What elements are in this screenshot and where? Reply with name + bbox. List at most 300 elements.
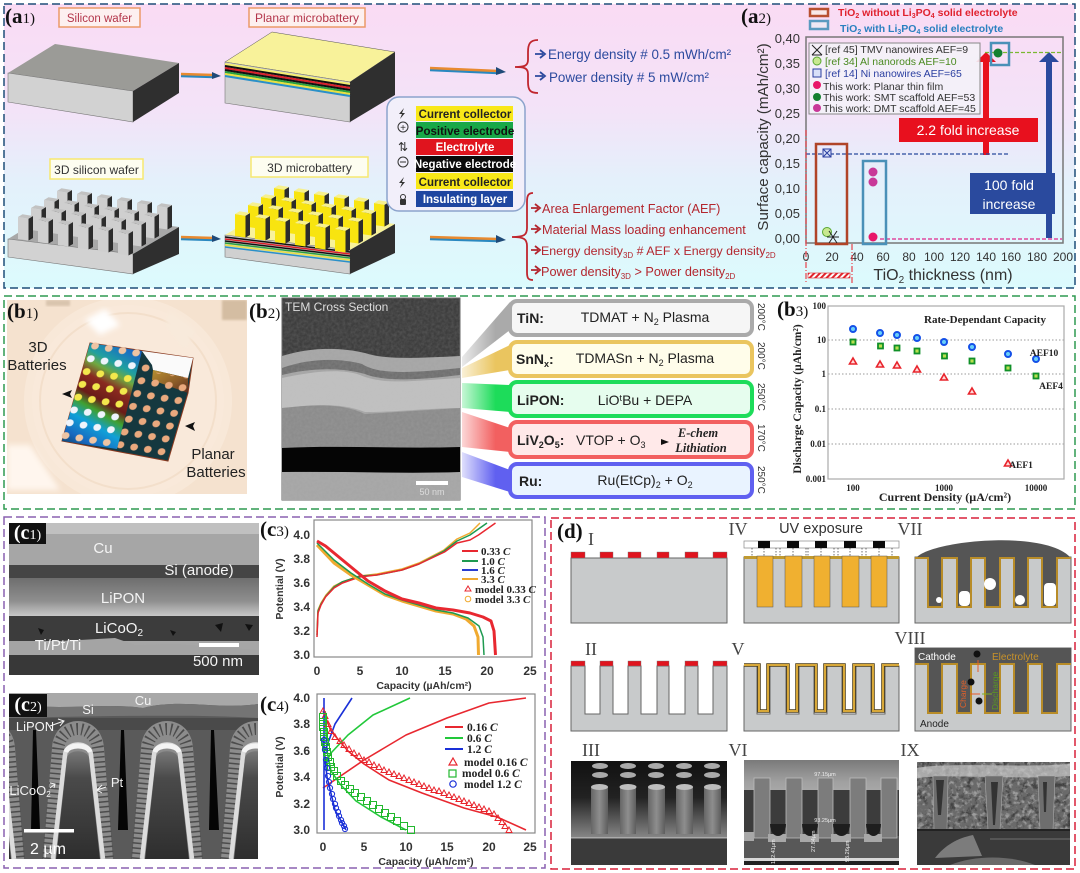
- SEM labels: Cu: [93, 540, 113, 557]
- y axis labels: 0,15: [775, 156, 800, 171]
- step VI SEM photo: VI: [728, 740, 748, 760]
- top legend: 3: [897, 29, 901, 36]
- y axis labels: 0,35: [775, 56, 800, 71]
- legend: model 0.16 C: [464, 757, 528, 769]
- chart frame: [806, 37, 1063, 243]
- step VIII: Anode: [920, 719, 949, 730]
- text: 3D metrics: > Power density: [631, 265, 726, 279]
- top legend: solid electrolyte: [920, 23, 1003, 35]
- step VI SEM photo: 97.15µm: [814, 772, 836, 778]
- step VI SEM photo: 27.84µm: [811, 830, 817, 852]
- layer: LiV2O5: E-chem: [677, 426, 718, 440]
- step IX SEM photo: [900, 740, 1070, 865]
- arrow: planar to metrics: [430, 67, 506, 75]
- layer: TiN: TiN:: [517, 310, 544, 326]
- step IV: [728, 519, 899, 623]
- text: planar batteries: Batteries: [186, 464, 246, 481]
- x axis labels: 20: [825, 250, 839, 264]
- layer: LiPON: LiPON:: [517, 392, 564, 408]
- step I: I: [588, 529, 594, 549]
- panel: ALD precursor stack: [462, 301, 766, 497]
- top legend: 2: [857, 29, 861, 36]
- SEM labels: Si: [82, 702, 94, 717]
- label c1: (c1): [14, 522, 41, 544]
- chart legend: [ref 14] Ni nanowires AEF=65: [825, 68, 962, 80]
- text: 3D batteries: [7, 339, 67, 374]
- step VIII: Charge: [958, 680, 968, 708]
- text: 3D metrics: Energy density: [541, 244, 623, 258]
- layer: LiV2O5: 5: [555, 440, 560, 450]
- top legend: PO: [901, 23, 916, 35]
- model markers blue: [324, 740, 345, 829]
- top legend: 4: [916, 29, 920, 36]
- text: 3D batteries: Batteries: [7, 357, 67, 374]
- label d: (d): [557, 519, 583, 543]
- step VI SEM photo: 122.41µm: [771, 839, 777, 864]
- legend: 1.0 C: [481, 556, 506, 568]
- layer: SnNx: x: [544, 359, 549, 369]
- 3D silicon wafer block: [8, 188, 179, 274]
- layer: SnNx: 2: [659, 358, 664, 368]
- text: planar metrics: [535, 47, 732, 85]
- text: planar metrics: Power density # 5 mW/cm²: [549, 70, 710, 85]
- series labels: [1009, 349, 1063, 471]
- series AEF1: [850, 358, 1012, 466]
- data points: [822, 48, 1002, 243]
- x tick labels: [314, 664, 537, 678]
- step VIII: VIII: [895, 628, 925, 648]
- x tick labels: 0: [314, 664, 321, 678]
- x tick labels: 15: [440, 840, 454, 854]
- scale bar and text: [24, 829, 74, 858]
- y axis labels: 0,05: [775, 206, 800, 221]
- label box: 3D microbattery: 3D microbattery: [267, 161, 352, 175]
- text: 3D metrics: Material Mass loading enhancement: [542, 223, 746, 237]
- y tick labels: [806, 301, 826, 484]
- panel: b background: [4, 296, 1075, 509]
- layer: LiPON: t: [620, 393, 623, 403]
- process temperatures: 250°C: [755, 383, 766, 411]
- process temperatures: [755, 303, 766, 494]
- step VII: VII: [898, 519, 922, 539]
- text: 3D metrics: Area Enlargement Factor (AEF): [542, 202, 720, 216]
- step VIII: [895, 628, 1071, 731]
- legend: 0.6 C: [467, 733, 492, 745]
- y tick labels: 3.8: [293, 552, 310, 566]
- y tick labels: 0.01: [810, 439, 826, 449]
- SEM labels: LiPON: [101, 590, 145, 607]
- step VI SEM photo: 93.26µm: [845, 840, 851, 862]
- model markers red: [323, 711, 509, 830]
- y tick labels: 1: [822, 369, 826, 379]
- battery chip: [56, 339, 193, 461]
- step VIII: Electrolyte: [992, 652, 1039, 663]
- SEM labels: Si (anode): [164, 562, 234, 579]
- step VI SEM photo: 93.25µm: [814, 818, 836, 824]
- label box: 3D silicon wafer: 3D silicon wafer: [54, 163, 139, 177]
- planar microbattery block: [225, 32, 395, 122]
- x tick labels: 1000: [935, 483, 954, 493]
- step V: V: [732, 639, 744, 659]
- chart legend: [ref 34] Al nanorods AEF=10: [825, 56, 957, 68]
- layer: Ru: [510, 464, 752, 497]
- process temperatures: 200°C: [755, 303, 766, 331]
- SEM labels: 2: [46, 790, 51, 799]
- photo background: [7, 300, 247, 501]
- label b2: (b2): [249, 299, 280, 323]
- scale bar: [199, 643, 239, 647]
- panel c3: voltage curves: [260, 517, 537, 692]
- y tick labels: 4.0: [293, 691, 310, 705]
- text: 3D metrics: 2D: [765, 251, 776, 260]
- text: planar batteries: Planar: [191, 446, 235, 463]
- hatched bar under axis: [808, 273, 850, 278]
- label box: planar microbattery: [249, 8, 365, 27]
- label box: 3D microbattery: [251, 157, 368, 177]
- chart title: Rate-Dependant Capacity: [924, 314, 1046, 326]
- label c2: [9, 694, 47, 717]
- process temperatures: 170°C: [755, 424, 766, 452]
- layer: SnNx: SnN: [516, 351, 544, 367]
- axis titles: Capacity (µAh/cm²): [376, 680, 472, 692]
- highlight boxes: [816, 43, 1009, 244]
- step II: II: [585, 639, 597, 659]
- label box: planar microbattery: Planar microbattery: [255, 11, 359, 25]
- step VI SEM photo: [728, 740, 899, 865]
- series labels: AEF1: [1009, 461, 1033, 471]
- layer: LiV2O5: 3: [640, 440, 645, 450]
- legend: [462, 546, 536, 606]
- layer: Ru: Ru(EtCp): [597, 472, 656, 488]
- layer: LiPON: LiO: [598, 392, 620, 408]
- chart frame: [314, 520, 532, 657]
- panel: c background: [4, 517, 545, 868]
- SEM labels: 500 nm: [193, 653, 243, 670]
- y axis title: Discharge Capacity (µAh/cm²): [792, 324, 804, 474]
- panel b2: TEM cross section: [249, 298, 460, 500]
- y axis title: Surface capacity (mAh/cm²): [755, 43, 772, 231]
- label box: silicon wafer: Silicon wafer: [67, 13, 132, 25]
- panel b3: rate-dependant capacity chart: [777, 297, 1064, 504]
- x tick labels: [320, 840, 537, 854]
- top legend: solid electrolyte: [935, 7, 1018, 19]
- chart legend: This work: SMT scaffold AEF=53: [823, 92, 975, 104]
- blue arrow and callout: increase: [983, 196, 1036, 212]
- scale bar: [416, 481, 448, 497]
- x axis labels: 0: [803, 250, 810, 264]
- layer: SnNx: [510, 342, 752, 376]
- legend: battery layers: Electrolyte: [436, 142, 494, 154]
- step VII: [898, 519, 1071, 623]
- y tick labels: 3.2: [293, 624, 310, 638]
- arrow: wafer to planar: [181, 72, 221, 79]
- scale bar and text: 2 µm: [30, 841, 66, 858]
- arrow: wafer to 3D battery: [181, 235, 221, 242]
- x axis labels: 200: [1053, 250, 1073, 264]
- layer: TiN: [510, 301, 752, 335]
- legend: battery layers: Positive electrode: [416, 126, 514, 138]
- legend: 0.33 C: [481, 546, 511, 558]
- SEM labels: LiPON: [16, 719, 54, 734]
- connector wedges: [462, 302, 510, 492]
- y axis labels: [775, 31, 800, 246]
- layer: TiN: 2: [654, 317, 659, 327]
- x axis labels: 60: [876, 250, 890, 264]
- y tick labels: [293, 528, 310, 662]
- x axis title: 2: [899, 275, 905, 286]
- step I: [571, 529, 727, 623]
- text: 3D metrics: 3D: [621, 272, 631, 281]
- top legend: [810, 7, 1018, 36]
- SEM labels: Pt: [111, 775, 124, 790]
- legend: battery layers: Insulating layer: [423, 194, 508, 206]
- layer: LiV2O5: VTOP + O: [576, 432, 640, 448]
- label box: 3D silicon wafer: [50, 159, 143, 179]
- layer: SnNx: Plasma: [664, 350, 714, 366]
- curves: [323, 698, 526, 830]
- layer: LiPON: Bu + DEPA: [622, 392, 693, 408]
- legend: model 3.3 C: [475, 594, 531, 606]
- chart legend: [809, 43, 980, 115]
- SEM labels: Ti/Pt/Ti: [35, 637, 81, 654]
- x axis labels: 100: [924, 250, 944, 264]
- blue arrow and callout: 100 fold: [984, 177, 1034, 193]
- panel c2: 3D SEM cross section: [9, 693, 258, 859]
- legend: 1.2 C: [467, 744, 492, 756]
- y axis labels: 0,30: [775, 81, 800, 96]
- x axis title: TiO: [873, 267, 899, 284]
- layer: Ru: + O: [661, 472, 688, 488]
- series AEF4: [850, 340, 1038, 378]
- legend: battery layers: Negative electrode: [414, 159, 516, 171]
- y tick labels: 3.6: [293, 744, 310, 758]
- x axis labels: [803, 250, 1073, 264]
- process temperatures: 250°C: [755, 466, 766, 494]
- x axis labels: 40: [850, 250, 864, 264]
- panel d: fabrication steps: [557, 519, 1071, 865]
- panel c4: voltage curves: [260, 691, 537, 868]
- legend: 3.3 C: [481, 574, 506, 586]
- y tick labels: 4.0: [293, 528, 310, 542]
- brace: planar metrics: [515, 40, 538, 93]
- x tick labels: 5: [357, 664, 364, 678]
- layer: LiV2O5: LiV: [517, 432, 539, 448]
- y tick labels: 100: [812, 301, 826, 311]
- silicon wafer block: [8, 44, 179, 122]
- top legend: PO: [916, 7, 931, 19]
- text: 3D metrics: 2D: [725, 272, 736, 281]
- x tick labels: [846, 483, 1048, 493]
- SEM labels: [35, 540, 243, 670]
- curves: [317, 523, 496, 655]
- red arrow and callout: 2.2 fold increase: [917, 122, 1020, 138]
- label c2: (c2): [14, 694, 42, 716]
- SEM image: [9, 693, 258, 859]
- top legend: TiO: [840, 23, 857, 35]
- layer: SnNx: :: [549, 351, 554, 367]
- legend: battery layers: Current collector: [419, 177, 512, 189]
- dashed guide lines: [806, 52, 1062, 283]
- red arrow and callout: [899, 52, 1038, 155]
- arrow: 3D battery to metrics: [430, 235, 506, 243]
- chart frame: [317, 694, 535, 833]
- label box: silicon wafer: [59, 8, 140, 27]
- y tick labels: 0.001: [806, 474, 826, 484]
- x tick labels: 0: [320, 840, 327, 854]
- top legend: without Li: [859, 7, 912, 19]
- layer: LiV2O5: [510, 422, 752, 457]
- axis titles: Potential (V): [274, 558, 286, 620]
- layer: LiV2O5: O: [544, 432, 555, 448]
- top legend: with Li: [861, 23, 897, 35]
- layer: TiN: Plasma: [659, 309, 710, 325]
- layer: LiV2O5: :: [560, 432, 564, 448]
- brace: 3D metrics: [512, 193, 533, 280]
- text: planar metrics: Energy density # 0.5 mWh/cm²: [548, 47, 732, 62]
- legend: model 0.33 C: [475, 584, 536, 596]
- legend: battery layers: +: [400, 123, 406, 134]
- x tick labels: 100: [846, 483, 860, 493]
- label b3: (b3): [777, 297, 808, 321]
- y axis labels: 0,25: [775, 106, 800, 121]
- top legend: 3: [912, 13, 916, 20]
- series labels: AEF10: [1030, 349, 1058, 359]
- axis titles: [274, 558, 472, 692]
- text: 3D batteries: 3D: [28, 339, 48, 356]
- SEM labels: 2: [137, 628, 143, 639]
- layer: LiPON: [510, 382, 752, 416]
- step III SEM photo: [571, 740, 727, 865]
- SEM labels: Cu: [135, 693, 151, 708]
- blue arrow and callout: [970, 52, 1059, 238]
- y tick labels: 10: [817, 335, 826, 345]
- process temperatures: 200°C: [755, 342, 766, 370]
- y axis labels: 0,00: [775, 231, 800, 246]
- x tick labels: 20: [480, 664, 494, 678]
- SEM layers: [9, 523, 259, 675]
- y tick labels: 3.0: [293, 648, 310, 662]
- text: 3D metrics: Power density: [541, 265, 621, 279]
- axis titles: [274, 736, 474, 868]
- panel b1: photo of 3D and planar batteries: [7, 299, 247, 501]
- label a1: (a1): [5, 4, 35, 28]
- x tick labels: 15: [438, 664, 452, 678]
- label c4: (c4): [260, 692, 289, 716]
- y tick labels: 3.2: [293, 797, 310, 811]
- y axis labels: 0,20: [775, 131, 800, 146]
- TEM image: [282, 298, 460, 500]
- model markers green: [323, 717, 411, 830]
- x tick labels: 10: [395, 664, 409, 678]
- SEM labels: LiCoO: [9, 783, 46, 798]
- panel c1: planar SEM cross section: [9, 522, 259, 675]
- label b1: (b1): [7, 299, 38, 323]
- step III SEM photo: III: [582, 740, 600, 760]
- chart legend: [ref 45] TMV nanowires AEF=9: [825, 44, 968, 56]
- top legend: 2: [855, 13, 859, 20]
- legend: model 1.2 C: [464, 779, 522, 791]
- layer: LiV2O5: Lithiation: [674, 441, 727, 455]
- SEM labels: [9, 693, 151, 799]
- panel a1: microbattery schematics: [5, 4, 776, 281]
- x tick labels: 25: [523, 664, 537, 678]
- x axis labels: 140: [976, 250, 996, 264]
- series labels: AEF4: [1039, 382, 1063, 392]
- legend: 1.6 C: [481, 565, 506, 577]
- x axis labels: 120: [950, 250, 970, 264]
- y tick labels: 3.0: [293, 823, 310, 837]
- step IV: IV: [728, 519, 748, 539]
- layer: TiN: TDMAT + N: [581, 309, 654, 325]
- x axis title: thickness (nm): [904, 267, 1013, 284]
- step V: [732, 639, 899, 731]
- axis titles: Potential (V): [274, 736, 286, 798]
- x axis labels: 80: [902, 250, 916, 264]
- chart legend: This work: Planar thin film: [823, 81, 943, 93]
- text: 3D metrics: # AEF x Energy density: [633, 244, 766, 258]
- y tick labels: 3.8: [293, 717, 310, 731]
- layer: Ru: 2: [688, 480, 693, 490]
- x axis labels: 160: [1001, 250, 1021, 264]
- x axis labels: 180: [1027, 250, 1047, 264]
- layer: LiV2O5: 2: [539, 440, 544, 450]
- legend: [445, 722, 528, 791]
- label a2: (a2): [741, 4, 771, 28]
- x tick labels: 20: [482, 840, 496, 854]
- chart legend: This work: DMT scaffold AEF=45: [823, 103, 976, 115]
- y tick labels: 3.4: [293, 600, 310, 614]
- step VIII: Discharge: [990, 671, 1000, 710]
- panel: d background: [551, 518, 1075, 869]
- 3D microbattery block: [225, 185, 395, 274]
- x tick labels: 5: [361, 840, 368, 854]
- x axis title: Current Density (µA/cm²): [879, 490, 1011, 504]
- series AEF10: [850, 326, 1039, 362]
- small white pointers: [50, 719, 106, 793]
- panel a2: surface capacity chart: [741, 4, 1073, 286]
- top legend: TiO: [838, 7, 855, 19]
- y tick labels: 3.6: [293, 576, 310, 590]
- SEM labels: LiCoO: [95, 620, 137, 637]
- scale bar: 50 nm: [419, 487, 445, 497]
- step IV: UV exposure: [779, 521, 863, 537]
- legend: battery layers: [387, 97, 525, 211]
- legend: model 0.6 C: [462, 768, 520, 780]
- text: 3D metrics: 3D: [623, 251, 633, 260]
- y axis labels: 0,10: [775, 181, 800, 196]
- x tick labels: 25: [523, 840, 537, 854]
- legend: battery layers: ⇅: [398, 140, 408, 154]
- step IX SEM photo: IX: [900, 740, 920, 760]
- axis titles: Capacity (µAh/cm²): [378, 856, 474, 868]
- layer: Ru: Ru:: [519, 473, 542, 489]
- y tick labels: 3.4: [293, 770, 310, 784]
- top legend: 4: [931, 13, 935, 20]
- text: TEM title: TEM Cross Section: [285, 300, 388, 314]
- text: 3D metrics: [531, 202, 776, 281]
- step VIII: Cathode: [918, 652, 956, 663]
- x tick labels: 10: [399, 840, 413, 854]
- pointer arrows: [62, 390, 195, 431]
- y tick labels: 0.1: [815, 404, 826, 414]
- text: planar batteries: [186, 446, 246, 481]
- layer: Ru: 2: [656, 480, 661, 490]
- layer: SnNx: TDMASn + N: [576, 350, 659, 366]
- y axis labels: 0,40: [775, 31, 800, 46]
- step II: [571, 639, 727, 731]
- y tick labels: [293, 691, 310, 837]
- legend: battery layers: Current collector: [419, 109, 512, 121]
